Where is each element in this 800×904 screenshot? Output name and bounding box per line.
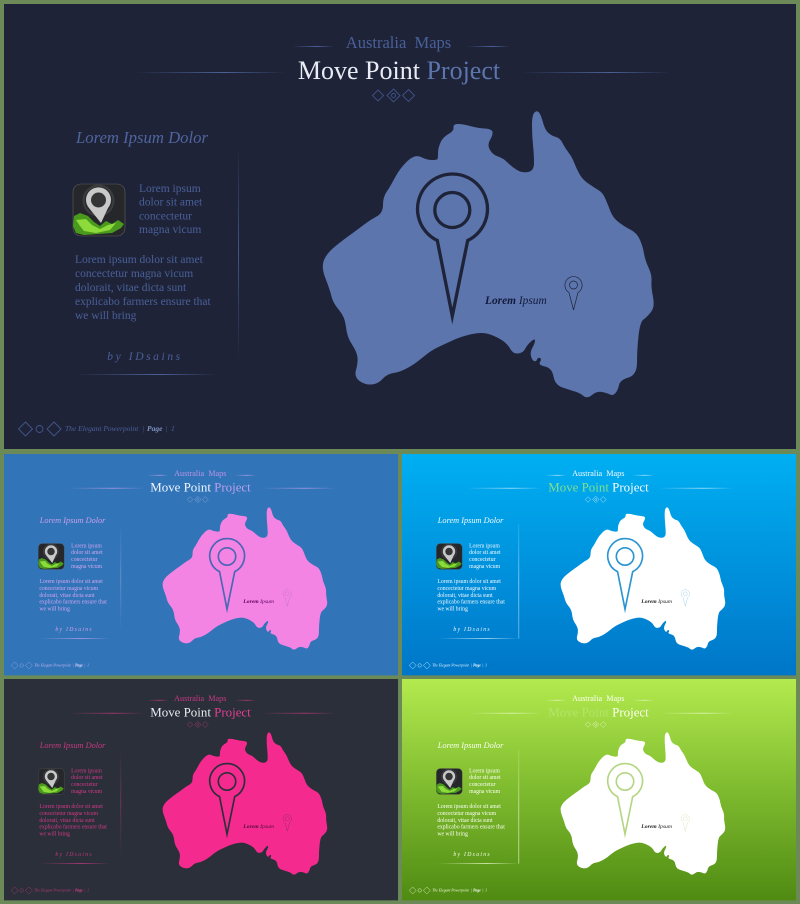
panel: green slide with white map [402,679,796,900]
text block: short paragraph: dolor sit amet [71,550,103,556]
text block: long paragraph: concectetur magna vicum [39,811,99,817]
footer: The Elegant Powerpoint [34,663,72,667]
text block: short paragraph: concectetur [469,557,496,563]
footer: The Elegant Powerpoint [34,888,72,892]
panel: blue slide with pink map [4,454,398,675]
map of Australia [163,507,327,650]
icon: large map pin [210,764,245,834]
icon: map pin app [38,544,64,569]
title block [467,469,733,503]
text block: short paragraph: dolor sit amet [469,550,501,556]
author byline: by IDsains [107,351,183,363]
map label: Lorem Ipsum [242,599,274,605]
text block: long paragraph: explicabo farmers ensure that [75,296,212,308]
title block: Move Point Project [298,56,501,85]
map label: Lorem Ipsum [640,599,672,605]
footer: 1 [485,888,487,892]
text block: long paragraph: dolorait, vitae dicta sunt [39,818,95,824]
footer: | [166,424,168,433]
map label: Lorem Ipsum [640,824,672,830]
text block: short paragraph: Lorem ipsum [71,769,102,775]
text block: long paragraph: Lorem ipsum dolor sit amet [75,254,204,266]
text block: short paragraph: concectetur [139,210,192,222]
footer [409,662,487,669]
footer: Page [75,888,83,892]
text block: short paragraph: magna vicum [139,224,201,236]
panel heading: Lorem Ipsum Dolor [437,516,504,525]
panel heading: Lorem Ipsum Dolor [39,516,106,525]
icon: large map pin [418,174,488,316]
title block: Australia Maps [572,694,624,703]
text block: long paragraph: Lorem ipsum dolor sit amet [437,579,501,585]
footer: 1 [171,424,175,433]
footer: | [73,663,74,667]
footer: | [142,424,144,433]
map of Australia [323,111,654,397]
text block: long paragraph: concectetur magna vicum [39,586,99,592]
footer: 1 [87,663,89,667]
title block: Move Point Project [150,704,251,719]
footer: | [482,663,483,667]
footer: | [84,888,85,892]
footer: The Elegant Powerpoint [432,663,470,667]
map label: Lorem Ipsum [242,824,274,830]
panel: bright blue slide with white map [402,454,796,675]
text block: long paragraph: explicabo farmers ensure that [39,824,107,831]
text block: long paragraph: we will bring [75,310,137,322]
text block: long paragraph: concectetur magna vicum [437,811,497,817]
icon: map pin app [38,769,64,794]
title block [467,694,733,728]
text block: long paragraph: explicabo farmers ensure that [39,599,107,606]
title block [135,33,670,102]
text block: long paragraph: explicabo farmers ensure that [437,599,505,606]
title block: Australia Maps [346,33,451,52]
footer [11,662,89,669]
footer: Page [147,424,163,433]
title block [69,694,335,728]
title block: Move Point Project [548,479,649,494]
map of Australia [163,732,327,875]
footer [18,422,175,436]
text block: short paragraph: concectetur [71,782,98,788]
text block: long paragraph: Lorem ipsum dolor sit amet [437,804,501,810]
panel: main dark navy slide [4,4,796,449]
icon: large map pin [210,539,245,609]
icon: map pin app [73,184,125,236]
text block: long paragraph: we will bring [39,607,70,613]
icon: large map pin [608,539,643,609]
icon: small map pin [283,815,292,831]
text block: short paragraph: dolor sit amet [139,196,203,208]
text block: short paragraph: dolor sit amet [71,775,103,781]
text block: short paragraph: magna vicum [71,564,103,570]
footer [409,887,487,894]
footer: | [482,888,483,892]
footer [11,887,89,894]
panel: charcoal slide with magenta map [4,679,398,900]
text block: short paragraph: magna vicum [71,789,103,795]
map of Australia [561,507,725,650]
footer: 1 [485,663,487,667]
panel heading: Lorem Ipsum Dolor [75,128,208,147]
title block: Move Point Project [150,479,251,494]
text block: short paragraph: magna vicum [469,564,501,570]
text block: long paragraph: concectetur magna vicum [437,586,497,592]
text block: long paragraph: dolorait, vitae dicta sunt [437,593,493,599]
text block: long paragraph: explicabo farmers ensure that [437,824,505,831]
panel heading: Lorem Ipsum Dolor [437,741,504,750]
text block: short paragraph: concectetur [71,557,98,563]
footer: Page [473,888,481,892]
footer: The Elegant Powerpoint [432,888,470,892]
icon: map pin app [436,769,462,794]
text block: long paragraph: we will bring [39,832,70,838]
footer: The Elegant Powerpoint [65,424,139,433]
text block: long paragraph: dolorait, vitae dicta sunt [437,818,493,824]
title block: Australia Maps [572,469,624,478]
text block: long paragraph: Lorem ipsum dolor sit amet [39,804,103,810]
icon: large map pin [608,764,643,834]
text block: short paragraph: Lorem ipsum [139,183,201,195]
title block: Australia Maps [174,469,226,478]
footer: 1 [87,888,89,892]
title block [69,469,335,503]
title block: Australia Maps [174,694,226,703]
footer: | [84,663,85,667]
text block: short paragraph: dolor sit amet [469,775,501,781]
text block: long paragraph: dolorait, vitae dicta sunt [39,593,95,599]
title block: Move Point Project [548,704,649,719]
text block: short paragraph: concectetur [469,782,496,788]
footer: Page [75,663,83,667]
panel heading: Lorem Ipsum Dolor [39,741,106,750]
author byline: by IDsains [453,627,491,633]
text block: long paragraph: dolorait, vitae dicta sunt [75,282,187,294]
icon: small map pin [681,815,690,831]
author byline: by IDsains [55,627,93,633]
text block: long paragraph: we will bring [437,607,468,613]
author byline: by IDsains [453,852,491,858]
text block: short paragraph: Lorem ipsum [469,769,500,775]
footer: | [471,663,472,667]
icon: small map pin [681,590,690,606]
author byline: by IDsains [55,852,93,858]
text block: short paragraph: magna vicum [469,789,501,795]
map of Australia [561,732,725,875]
icon: map pin app [436,544,462,569]
footer: | [73,888,74,892]
icon: small map pin [565,277,582,310]
footer: Page [473,663,481,667]
map label: Lorem Ipsum [484,295,547,307]
text block: short paragraph: Lorem ipsum [71,544,102,550]
text block: long paragraph: Lorem ipsum dolor sit amet [39,579,103,585]
text block: long paragraph: we will bring [437,832,468,838]
text block: short paragraph: Lorem ipsum [469,544,500,550]
icon: small map pin [283,590,292,606]
text block: long paragraph: concectetur magna vicum [75,268,193,280]
footer: | [471,888,472,892]
